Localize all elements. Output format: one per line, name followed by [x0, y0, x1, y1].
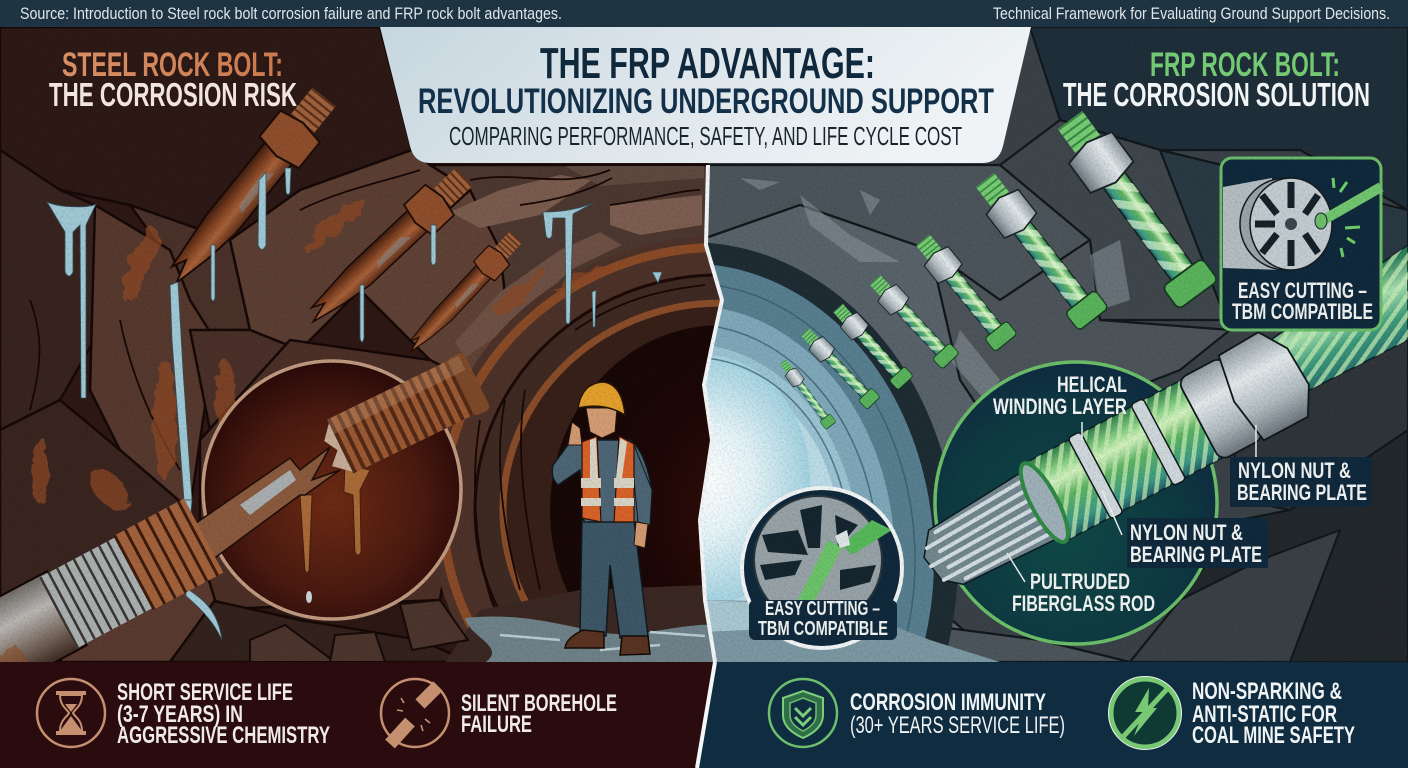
safety vest [582, 436, 634, 522]
label: nylon nut upper [1237, 458, 1367, 505]
small TBM inset circle [742, 488, 902, 648]
small TBM inset circle: EASY CUTTING – [765, 598, 880, 620]
rock highlights [740, 178, 1130, 400]
small drop [306, 591, 312, 603]
label: helical winding [993, 372, 1127, 419]
tunnel arch ribs [441, 243, 720, 633]
tunnel rings and light [702, 242, 958, 646]
water floor [700, 600, 1000, 662]
mini bolt [798, 540, 842, 600]
label: nylon nut lower: BEARING PLATE [1130, 542, 1262, 567]
label: nylon nut lower: NYLON NUT & [1130, 520, 1243, 545]
FRP bolt cutaway [904, 245, 1408, 607]
hex nut [1218, 332, 1310, 442]
text: service life: (3-7 YEARS) IN [117, 701, 243, 728]
left scene: corroded steel tunnel [0, 27, 720, 662]
arch rock cracks [30, 170, 705, 610]
outer rod [1272, 245, 1408, 391]
title banner [380, 27, 1031, 163]
TBM caption [1232, 278, 1373, 324]
corroded bolts on the rock [155, 81, 526, 360]
text: silent failure: FAILURE [461, 711, 532, 738]
callout labels [993, 372, 1372, 616]
text: service life: AGGRESSIVE CHEMISTRY [117, 722, 330, 749]
panel: steel drawbacks [0, 662, 715, 768]
top source bar [0, 0, 1408, 27]
label backgrounds [1127, 457, 1372, 568]
cross-section inset circle [935, 362, 1217, 644]
main title: THE FRP ADVANTAGE: [540, 39, 875, 88]
panel: FRP benefits [697, 662, 1408, 768]
text: non-sparking: ANTI-STATIC FOR [1192, 701, 1337, 728]
heading: FRP rock bolt [1063, 46, 1370, 113]
title second line: REVOLUTIONIZING UNDERGROUND SUPPORT [418, 82, 994, 121]
label: nylon nut lower [1130, 520, 1262, 567]
rust streaks [32, 192, 629, 518]
heading: steel rock bolt [49, 46, 297, 113]
label: pultruded rod: FIBERGLASS ROD [1012, 591, 1155, 616]
broken upper threaded section [324, 353, 490, 474]
worker figure [552, 382, 652, 655]
heading: steel rock bolt: THE CORROSION RISK [49, 76, 297, 113]
leader lines [1007, 422, 1256, 582]
icon: no spark [1108, 676, 1182, 750]
collar [1180, 359, 1261, 458]
text: corrosion immunity: CORROSION IMMUNITY [850, 689, 1046, 716]
rock wall [0, 27, 712, 662]
panel divider [697, 662, 715, 768]
label: helical winding: WINDING LAYER [993, 394, 1127, 419]
face [586, 408, 617, 438]
fiberglass strands [923, 473, 1054, 586]
rust dripping [300, 465, 370, 572]
hard hat [578, 382, 625, 415]
text: silent failure: SILENT BOREHOLE [461, 690, 617, 717]
boots [565, 630, 650, 655]
text: silent failure [461, 690, 617, 738]
subtitle: COMPARING PERFORMANCE, SAFETY, AND LIFE CYCLE COST [449, 121, 962, 151]
text: service life [117, 679, 330, 749]
cutter head [1223, 178, 1381, 270]
source note: Source: Introduction to Steel rock bolt corrosion failure and FRP rock bolt advantages. [20, 4, 562, 23]
jagged centre divider [700, 165, 722, 662]
inset circle: bolt failure closeup [203, 361, 461, 619]
label: pultruded rod: PULTRUDED [1030, 569, 1130, 594]
hands [568, 422, 648, 548]
label: pultruded rod [1012, 569, 1155, 616]
helical winding [1024, 375, 1233, 541]
wrap rings [1068, 431, 1123, 519]
striated rock bands [450, 166, 704, 358]
label: nylon nut upper: NYLON NUT & [1238, 458, 1351, 483]
text: corrosion immunity [850, 689, 1065, 739]
right scene: FRP tunnel [702, 27, 1408, 662]
text: non-sparking [1192, 678, 1355, 749]
text: corrosion immunity: (30+ YEARS SERVICE LIFE) [850, 712, 1065, 739]
small TBM inset circle: TBM COMPATIBLE [758, 618, 888, 640]
heading: steel rock bolt: STEEL ROCK BOLT: [62, 46, 283, 84]
rock wall [700, 27, 1408, 662]
shirt and arms [552, 440, 652, 522]
ring lines [711, 285, 916, 632]
icon: shield [769, 679, 837, 747]
legs [580, 520, 648, 638]
text: non-sparking: NON-SPARKING & [1192, 678, 1342, 705]
icon: broken bolt [381, 679, 449, 747]
large threaded steel bolt [0, 498, 224, 662]
TBM inset box [1221, 158, 1381, 330]
broken lower rod [186, 447, 340, 560]
water drips [47, 168, 662, 640]
rock bolts in the wall [777, 104, 1220, 430]
text: service life: SHORT SERVICE LIFE [117, 679, 293, 706]
floor and water [446, 585, 707, 662]
label: helical winding: HELICAL [1057, 372, 1127, 397]
icon: hourglass [37, 679, 105, 747]
